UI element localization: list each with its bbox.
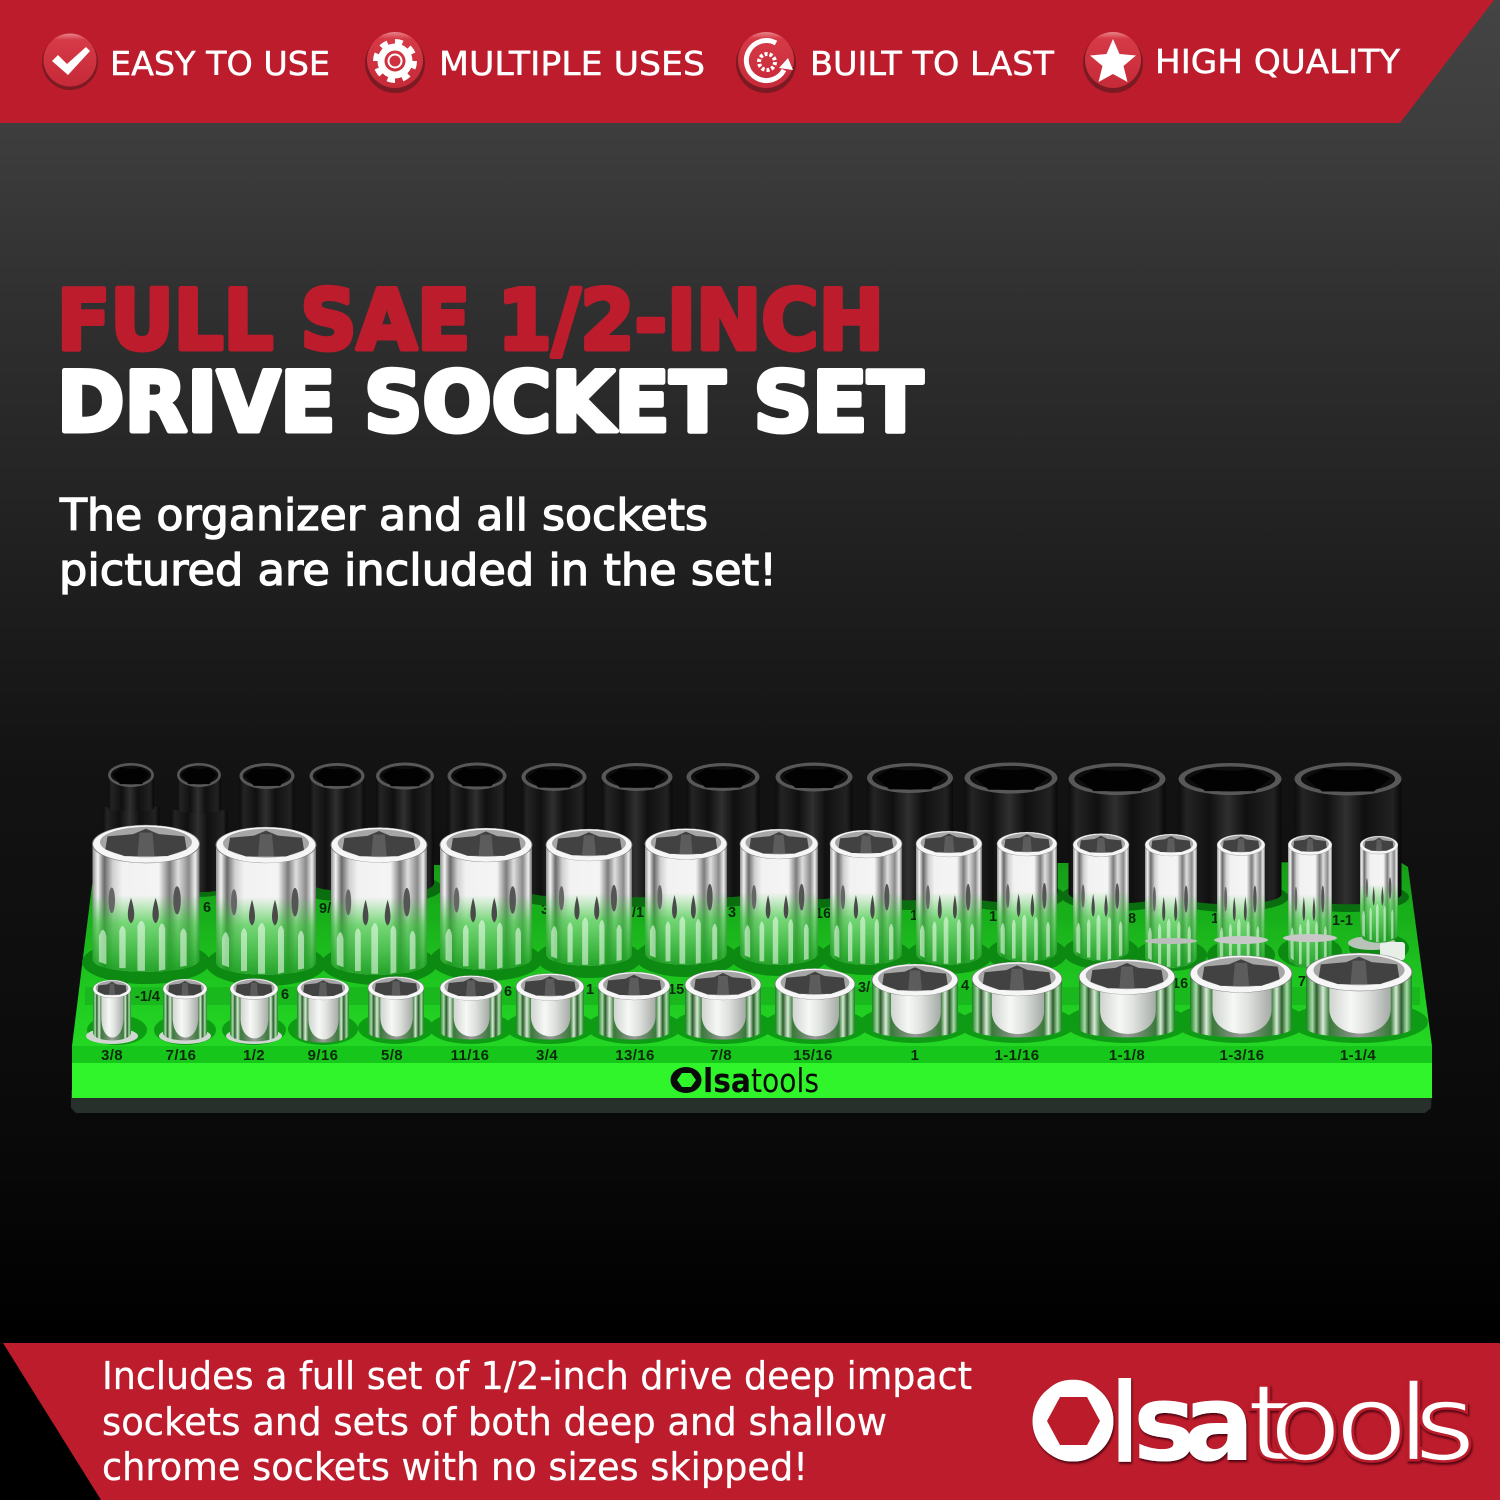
tray base bbox=[71, 1090, 1432, 1113]
brand logo: O bbox=[1033, 1361, 1113, 1486]
socket organizer product bbox=[71, 762, 1432, 1113]
label: built to last: BUILT TO LAST bbox=[810, 44, 1055, 83]
brand logo: l bbox=[1110, 1362, 1139, 1485]
partly hidden size labels: 6 bbox=[203, 900, 211, 916]
partly hidden size labels: 6 bbox=[504, 984, 512, 1000]
front size labels: 1 bbox=[911, 1047, 919, 1064]
description text: Includes a full set of 1/2-inch drive deep impact bbox=[102, 1354, 972, 1398]
shallow chrome socket holes bbox=[87, 1001, 1428, 1045]
front size labels: 1-3/16 bbox=[1220, 1047, 1264, 1064]
brand logo: a bbox=[1183, 1362, 1255, 1485]
front size labels: 5/8 bbox=[381, 1047, 403, 1064]
title line 2: DRIVE SOCKET SET bbox=[57, 354, 923, 451]
deep chrome sockets row bbox=[92, 825, 1405, 975]
partly hidden size labels: 16 bbox=[815, 906, 831, 922]
label: high quality: HIGH QUALITY bbox=[1155, 42, 1401, 81]
bottom banner bbox=[3, 1343, 1500, 1500]
tray logo bbox=[670, 1061, 819, 1100]
partly hidden size labels: 3 bbox=[541, 902, 549, 918]
brand logo bbox=[1032, 1361, 1476, 1486]
front size labels: 1/2 bbox=[243, 1047, 265, 1064]
partly hidden size labels: 7 bbox=[1298, 974, 1306, 990]
subtitle text bbox=[59, 490, 777, 596]
partly hidden size labels: 3 bbox=[728, 905, 736, 921]
brand logo: s bbox=[1133, 1362, 1196, 1485]
front size labels: 3/4 bbox=[536, 1047, 558, 1064]
partly hidden size labels: 16 bbox=[1172, 976, 1188, 992]
partly hidden size labels: -1/4 bbox=[135, 989, 160, 1005]
deep chrome socket holes bbox=[82, 933, 1409, 986]
brand logo: tools bbox=[1247, 1362, 1476, 1485]
icon: gear bbox=[365, 32, 425, 93]
tray logo: O bbox=[671, 1061, 702, 1100]
front size labels: 3/8 bbox=[101, 1047, 123, 1064]
impact socket holes bbox=[96, 873, 1409, 912]
front size labels: 9/16 bbox=[308, 1047, 338, 1064]
partly hidden size labels: 3/ bbox=[858, 980, 870, 996]
front size labels: 13/16 bbox=[615, 1047, 655, 1064]
icon: star bbox=[1083, 32, 1143, 93]
title line 1: FULL SAE 1/2-INCH bbox=[57, 272, 884, 369]
front size labels: 1-1/4 bbox=[1340, 1047, 1376, 1064]
icon: check mark bbox=[42, 34, 98, 90]
front size labels: 1-1/8 bbox=[1109, 1047, 1145, 1064]
top banner bbox=[0, 0, 1494, 123]
front size labels: 15/16 bbox=[793, 1047, 833, 1064]
partly hidden size labels: /1 bbox=[632, 905, 644, 921]
front size labels bbox=[101, 1047, 1376, 1064]
partly hidden size labels: 1 bbox=[910, 908, 918, 924]
partly hidden size labels: 1-1 bbox=[1332, 913, 1353, 929]
partly hidden size labels: 1 bbox=[989, 909, 997, 925]
icon: circular arrow with gear bbox=[736, 32, 796, 93]
description text: sockets and sets of both deep and shallow bbox=[102, 1400, 887, 1444]
front size labels: 7/16 bbox=[166, 1047, 196, 1064]
partly hidden size labels: 6 bbox=[281, 987, 289, 1003]
shallow chrome sockets row bbox=[86, 953, 1412, 1044]
label: easy to use: EASY TO USE bbox=[110, 44, 330, 83]
front size labels: 11/16 bbox=[451, 1047, 489, 1064]
partly hidden size labels: 4 bbox=[961, 978, 969, 994]
description text bbox=[102, 1354, 972, 1489]
partly hidden size labels bbox=[135, 900, 1353, 1005]
partly hidden size labels: 1 bbox=[1211, 911, 1219, 927]
subtitle line 1: The organizer and all sockets bbox=[59, 490, 708, 541]
tray logo: lsa bbox=[703, 1061, 751, 1100]
green tray bbox=[72, 862, 1432, 1098]
subtitle line 2: pictured are included in the set! bbox=[59, 545, 777, 596]
front size labels: 7/8 bbox=[710, 1047, 732, 1064]
title bbox=[57, 272, 923, 451]
partly hidden size labels: 1 bbox=[586, 982, 594, 998]
banner shape bbox=[0, 0, 1494, 123]
partly hidden size labels: 15 bbox=[668, 982, 684, 998]
front size labels: 1-1/16 bbox=[995, 1047, 1039, 1064]
partly hidden size labels: 9/ bbox=[319, 901, 331, 917]
black impact sockets row bbox=[102, 762, 1402, 904]
description text: chrome sockets with no sizes skipped! bbox=[102, 1445, 808, 1489]
label: multiple uses: MULTIPLE USES bbox=[439, 44, 705, 83]
tray logo: tools bbox=[751, 1061, 819, 1100]
banner shape bbox=[3, 1343, 1500, 1500]
partly hidden size labels: 8 bbox=[1128, 911, 1136, 927]
